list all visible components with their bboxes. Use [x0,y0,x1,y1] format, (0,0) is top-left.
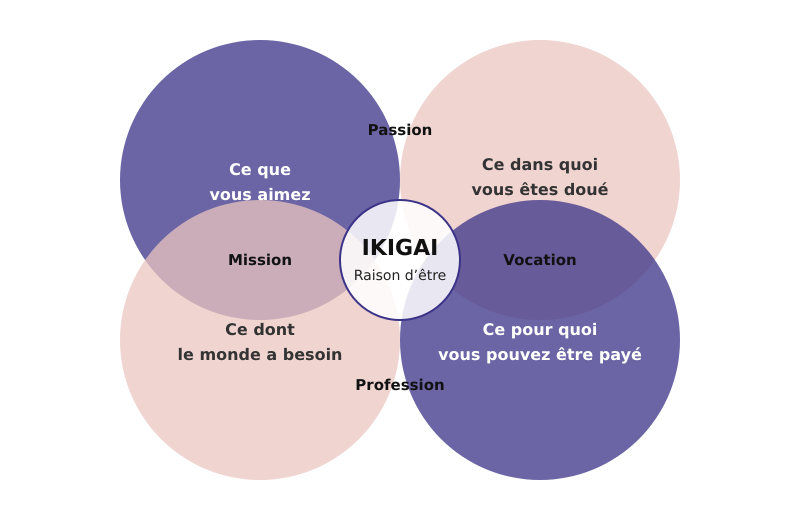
text: ce pour quoi vous pouvez être payé [438,320,642,364]
text: ce pour quoi vous pouvez être payé: Ce pour quoi [483,320,597,339]
circle: ce dans quoi vous êtes doué [400,40,680,320]
label: mission: Mission [228,251,292,269]
text: ce dans quoi vous êtes doué: Ce dans quoi [482,155,598,174]
circle: ce que vous aimez [120,40,400,320]
text: ce dont le monde a besoin: Ce dont [225,320,295,339]
label: profession: Profession [355,376,445,394]
circle: ce pour quoi vous pouvez être payé [400,200,680,480]
text: ce que vous aimez [209,160,311,204]
text: ce que vous aimez: Ce que [229,160,291,179]
text: ce dont le monde a besoin: le monde a besoin [178,345,342,364]
text: ce que vous aimez: vous aimez [209,185,311,204]
center circle: ikigai [340,200,460,320]
label: passion: Passion [368,121,432,139]
text: ce pour quoi vous pouvez être payé: vous pouvez être payé [438,345,642,364]
center subtitle: Raison d’être [354,268,446,284]
center title: IKIGAI [362,236,438,261]
circle: ce dont le monde a besoin [120,200,400,480]
text: ce dans quoi vous êtes doué: vous êtes doué [471,180,609,199]
text: ce dans quoi vous êtes doué [471,155,609,199]
label: vocation: Vocation [503,251,577,269]
text: ce dont le monde a besoin [178,320,342,364]
